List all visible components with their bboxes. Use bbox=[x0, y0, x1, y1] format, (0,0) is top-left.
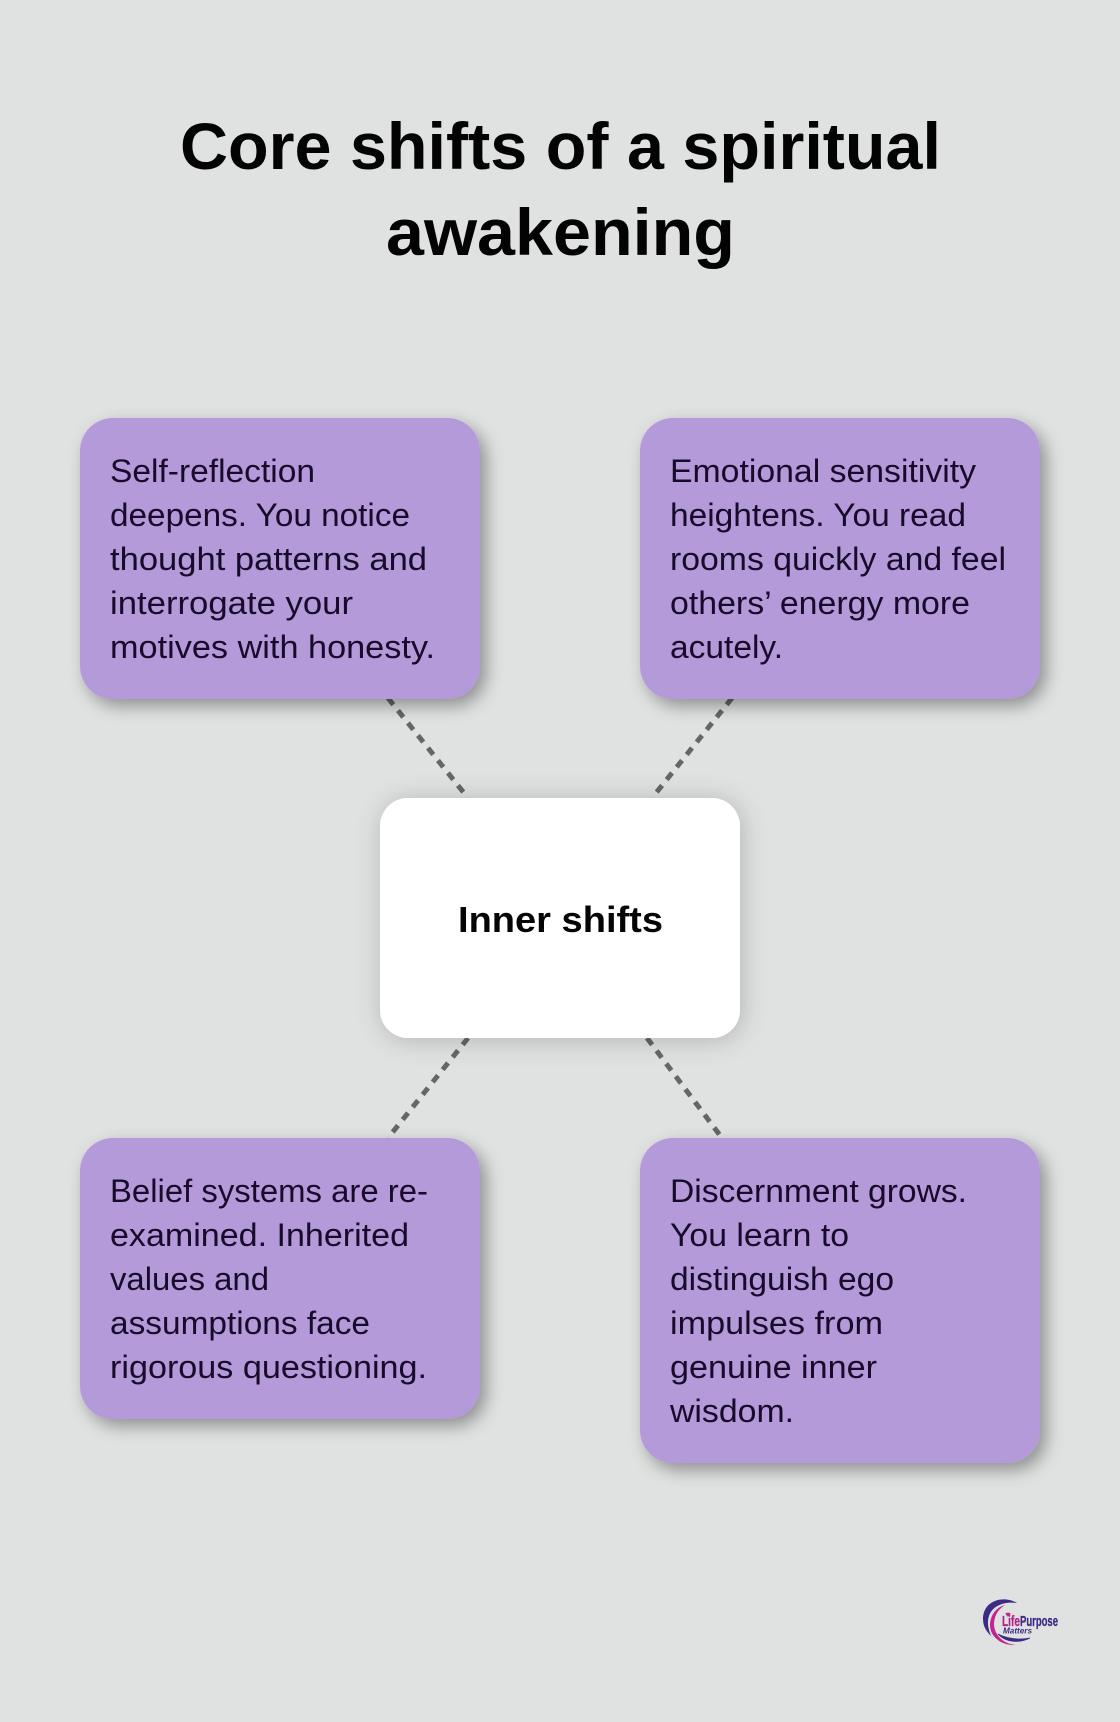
panel: belief systems: rigorous questioning. bbox=[110, 1349, 427, 1385]
title bbox=[180, 109, 941, 269]
dashed connectors bbox=[388, 698, 732, 1138]
panel: discernment: genuine inner bbox=[670, 1349, 877, 1385]
panel: center inner shifts bbox=[380, 798, 740, 1038]
logo: Life Purpose Matters bbox=[983, 1599, 1058, 1645]
title: awakening bbox=[386, 195, 735, 269]
panel: self-reflection: thought patterns and bbox=[110, 541, 427, 577]
panel: emotional sensitivity: heightens. You read bbox=[670, 497, 966, 533]
panel: emotional sensitivity: Emotional sensitivity bbox=[670, 453, 976, 489]
panel: self-reflection: Self-reflection bbox=[110, 453, 315, 489]
panel: discernment bbox=[640, 1138, 1040, 1463]
panel: belief systems bbox=[80, 1138, 480, 1419]
logo: Life Purpose Matters: Matters bbox=[1003, 1626, 1033, 1636]
panel: self-reflection bbox=[80, 418, 480, 699]
panel: belief systems: examined. Inherited bbox=[110, 1217, 409, 1253]
panel: belief systems: values and bbox=[110, 1261, 269, 1297]
title: Core shifts of a spiritual bbox=[180, 109, 941, 183]
panel: discernment: wisdom. bbox=[669, 1393, 794, 1429]
panel: discernment: Discernment grows. bbox=[670, 1173, 967, 1209]
panel: emotional sensitivity: others’ energy more bbox=[670, 585, 970, 621]
panel: self-reflection: interrogate your bbox=[110, 585, 353, 621]
panel: belief systems: assumptions face bbox=[110, 1305, 370, 1341]
panel: belief systems: Belief systems are re- bbox=[110, 1173, 428, 1209]
panel: emotional sensitivity: rooms quickly and feel bbox=[670, 541, 1006, 577]
logo: Life Purpose Matters: Purpose bbox=[1020, 1613, 1058, 1630]
panel: discernment: distinguish ego bbox=[670, 1261, 894, 1297]
panel: self-reflection: motives with honesty. bbox=[110, 629, 435, 665]
panel: self-reflection: deepens. You notice bbox=[110, 497, 410, 533]
panel: center inner shifts: Inner shifts bbox=[458, 899, 663, 940]
panel: emotional sensitivity: acutely. bbox=[670, 629, 783, 665]
panel: discernment: You learn to bbox=[670, 1217, 849, 1253]
panel: emotional sensitivity bbox=[640, 418, 1040, 699]
panel: discernment: impulses from bbox=[670, 1305, 883, 1341]
logo: Life Purpose Matters: Life bbox=[1002, 1613, 1020, 1630]
